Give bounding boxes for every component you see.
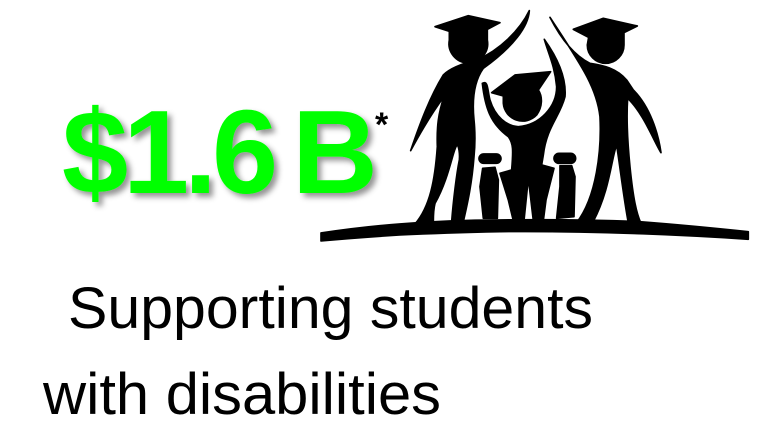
caption: with disabilities xyxy=(42,362,441,427)
icon: graduates reaching up xyxy=(321,11,748,241)
headline figure: $1.6 B xyxy=(62,86,378,219)
wheelchair figure left xyxy=(479,154,501,218)
ground arc xyxy=(321,220,748,241)
left graduate xyxy=(411,11,529,224)
caption: Supporting students xyxy=(68,276,593,341)
right graduate xyxy=(550,17,661,223)
footnote asterisk: * xyxy=(375,106,389,144)
headline figure: $1.6 B: $1.6 xyxy=(62,86,278,219)
wheelchair figure right xyxy=(554,153,576,218)
caption xyxy=(42,276,593,427)
center graduate xyxy=(482,39,565,221)
headline figure: $1.6 B: B xyxy=(292,86,378,219)
